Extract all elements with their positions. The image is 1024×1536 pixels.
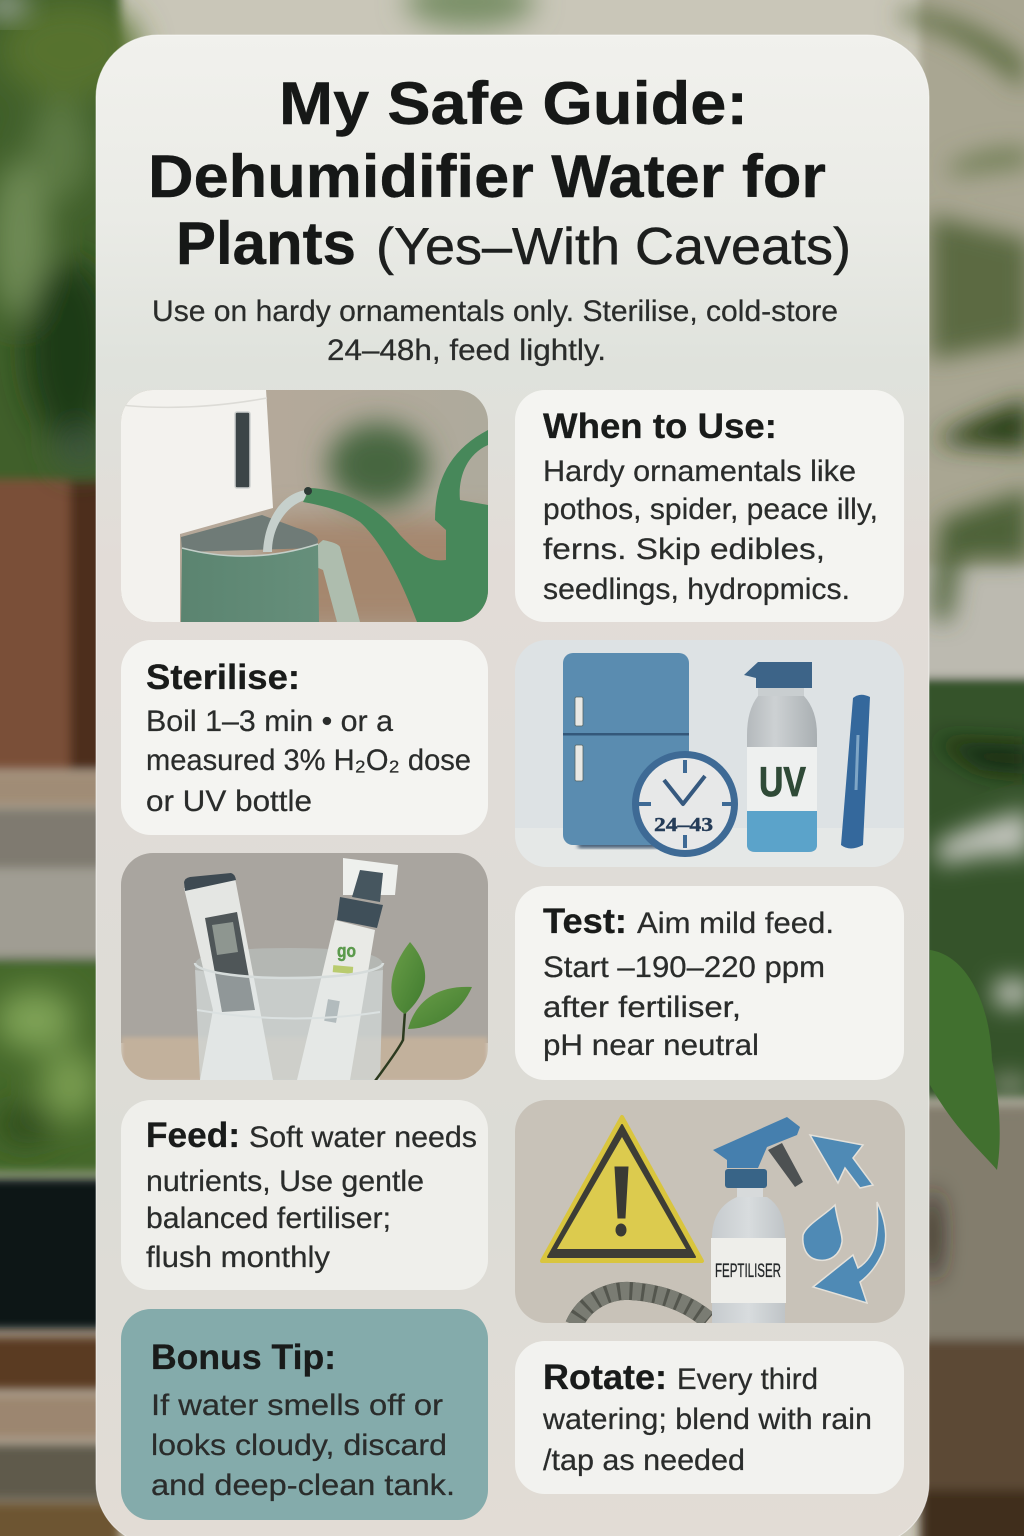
title: My Safe Guide: — [279, 70, 748, 137]
card: feed: balanced fertiliser; — [146, 1202, 391, 1235]
card: feed: Soft water needs — [249, 1121, 477, 1154]
icon: coiled hose — [574, 1291, 708, 1325]
icon: water stream — [263, 490, 307, 552]
card: when to use — [515, 390, 904, 622]
icon: glass back — [195, 948, 383, 1080]
card: sterilise: or UV bottle — [146, 785, 312, 818]
card: sterilise — [121, 640, 488, 835]
icon: watering can — [303, 430, 488, 622]
icon: fertiliser spray bottle — [711, 1117, 803, 1325]
crisp leaf on the right — [930, 950, 1000, 1170]
title — [148, 70, 851, 277]
card: when to use: Hardy ornamentals like — [543, 455, 856, 488]
callout: bonus tip — [121, 1309, 488, 1520]
title: (Yes–With Caveats) — [376, 218, 851, 276]
card: test: Test: — [543, 902, 627, 941]
card: rotate: watering; blend with rain — [542, 1403, 872, 1436]
card: test: after fertiliser, — [543, 991, 741, 1024]
subtitle: 24–48h, feed lightly. — [327, 334, 606, 367]
image panel: warning sign, fertiliser sprayer, recycle arrows — [515, 1100, 905, 1325]
main translucent panel — [96, 35, 929, 1536]
subtitle — [152, 295, 838, 367]
icon: pH meter: go — [337, 941, 356, 961]
card: test: Start –190–220 ppm — [543, 951, 825, 984]
icon: pH meter — [297, 858, 398, 1080]
card: when to use: seedlings, hydropmics. — [543, 573, 850, 606]
card: feed: Feed: — [146, 1116, 240, 1155]
icon: clock 24-43: 24–43 — [654, 814, 713, 836]
icon: glass front — [195, 963, 383, 1080]
card: rotate — [515, 1341, 904, 1494]
callout: bonus tip: looks cloudy, discard — [151, 1429, 447, 1462]
icon: fertiliser spray bottle: FEPTILISER — [715, 1261, 781, 1282]
card: when to use: ferns. Skip edibles, — [543, 533, 825, 566]
title: Dehumidifier Water for — [148, 143, 826, 210]
icon: green leaf — [375, 942, 472, 1081]
card: feed: nutrients, Use gentle — [146, 1165, 424, 1198]
card: rotate: Every third — [677, 1363, 818, 1396]
callout: bonus tip: Bonus Tip: — [151, 1338, 336, 1377]
card: test: pH near neutral — [543, 1029, 759, 1062]
card: sterilise: Boil 1–3 min • or a — [146, 705, 393, 738]
icon: recycle arrows and water drop — [803, 1135, 886, 1303]
icon: warning triangle — [542, 1117, 702, 1261]
card: when to use: When to Use: — [543, 407, 777, 446]
right side bands and foliage — [920, 0, 1024, 1536]
icon: UV bottle — [744, 662, 817, 852]
icon: dehumidifier — [121, 389, 273, 622]
title: Plants — [176, 210, 356, 277]
card: rotate: Rotate: — [543, 1358, 667, 1397]
image panel: meters in glass with leaf — [121, 853, 488, 1082]
icon: blue pen — [841, 695, 870, 848]
card: sterilise: measured 3% H₂O₂ dose — [146, 744, 471, 777]
card: rotate: /tap as needed — [543, 1444, 745, 1477]
card: test: Aim mild feed. — [637, 907, 834, 940]
icon: TDS meter — [184, 873, 273, 1080]
callout: bonus tip: If water smells off or — [151, 1389, 443, 1422]
image panel: dehumidifier pouring into watering can — [121, 389, 498, 628]
card: feed — [121, 1100, 488, 1290]
callout: bonus tip: and deep-clean tank. — [151, 1469, 455, 1502]
card: when to use: pothos, spider, peace illy, — [543, 493, 878, 526]
image panel: fridge, clock, UV bottle — [515, 640, 904, 870]
icon: clock 24-43 — [632, 751, 738, 857]
card: sterilise: Sterilise: — [146, 658, 300, 697]
icon: UV bottle: UV — [759, 758, 806, 805]
icon: fridge — [563, 653, 689, 845]
card: feed: flush monthly — [146, 1241, 330, 1274]
subtitle: Use on hardy ornamentals only. Sterilise, cold-store — [152, 295, 838, 328]
card: test — [515, 886, 904, 1080]
icon: jug — [181, 515, 360, 622]
left side bands — [0, 0, 120, 1536]
